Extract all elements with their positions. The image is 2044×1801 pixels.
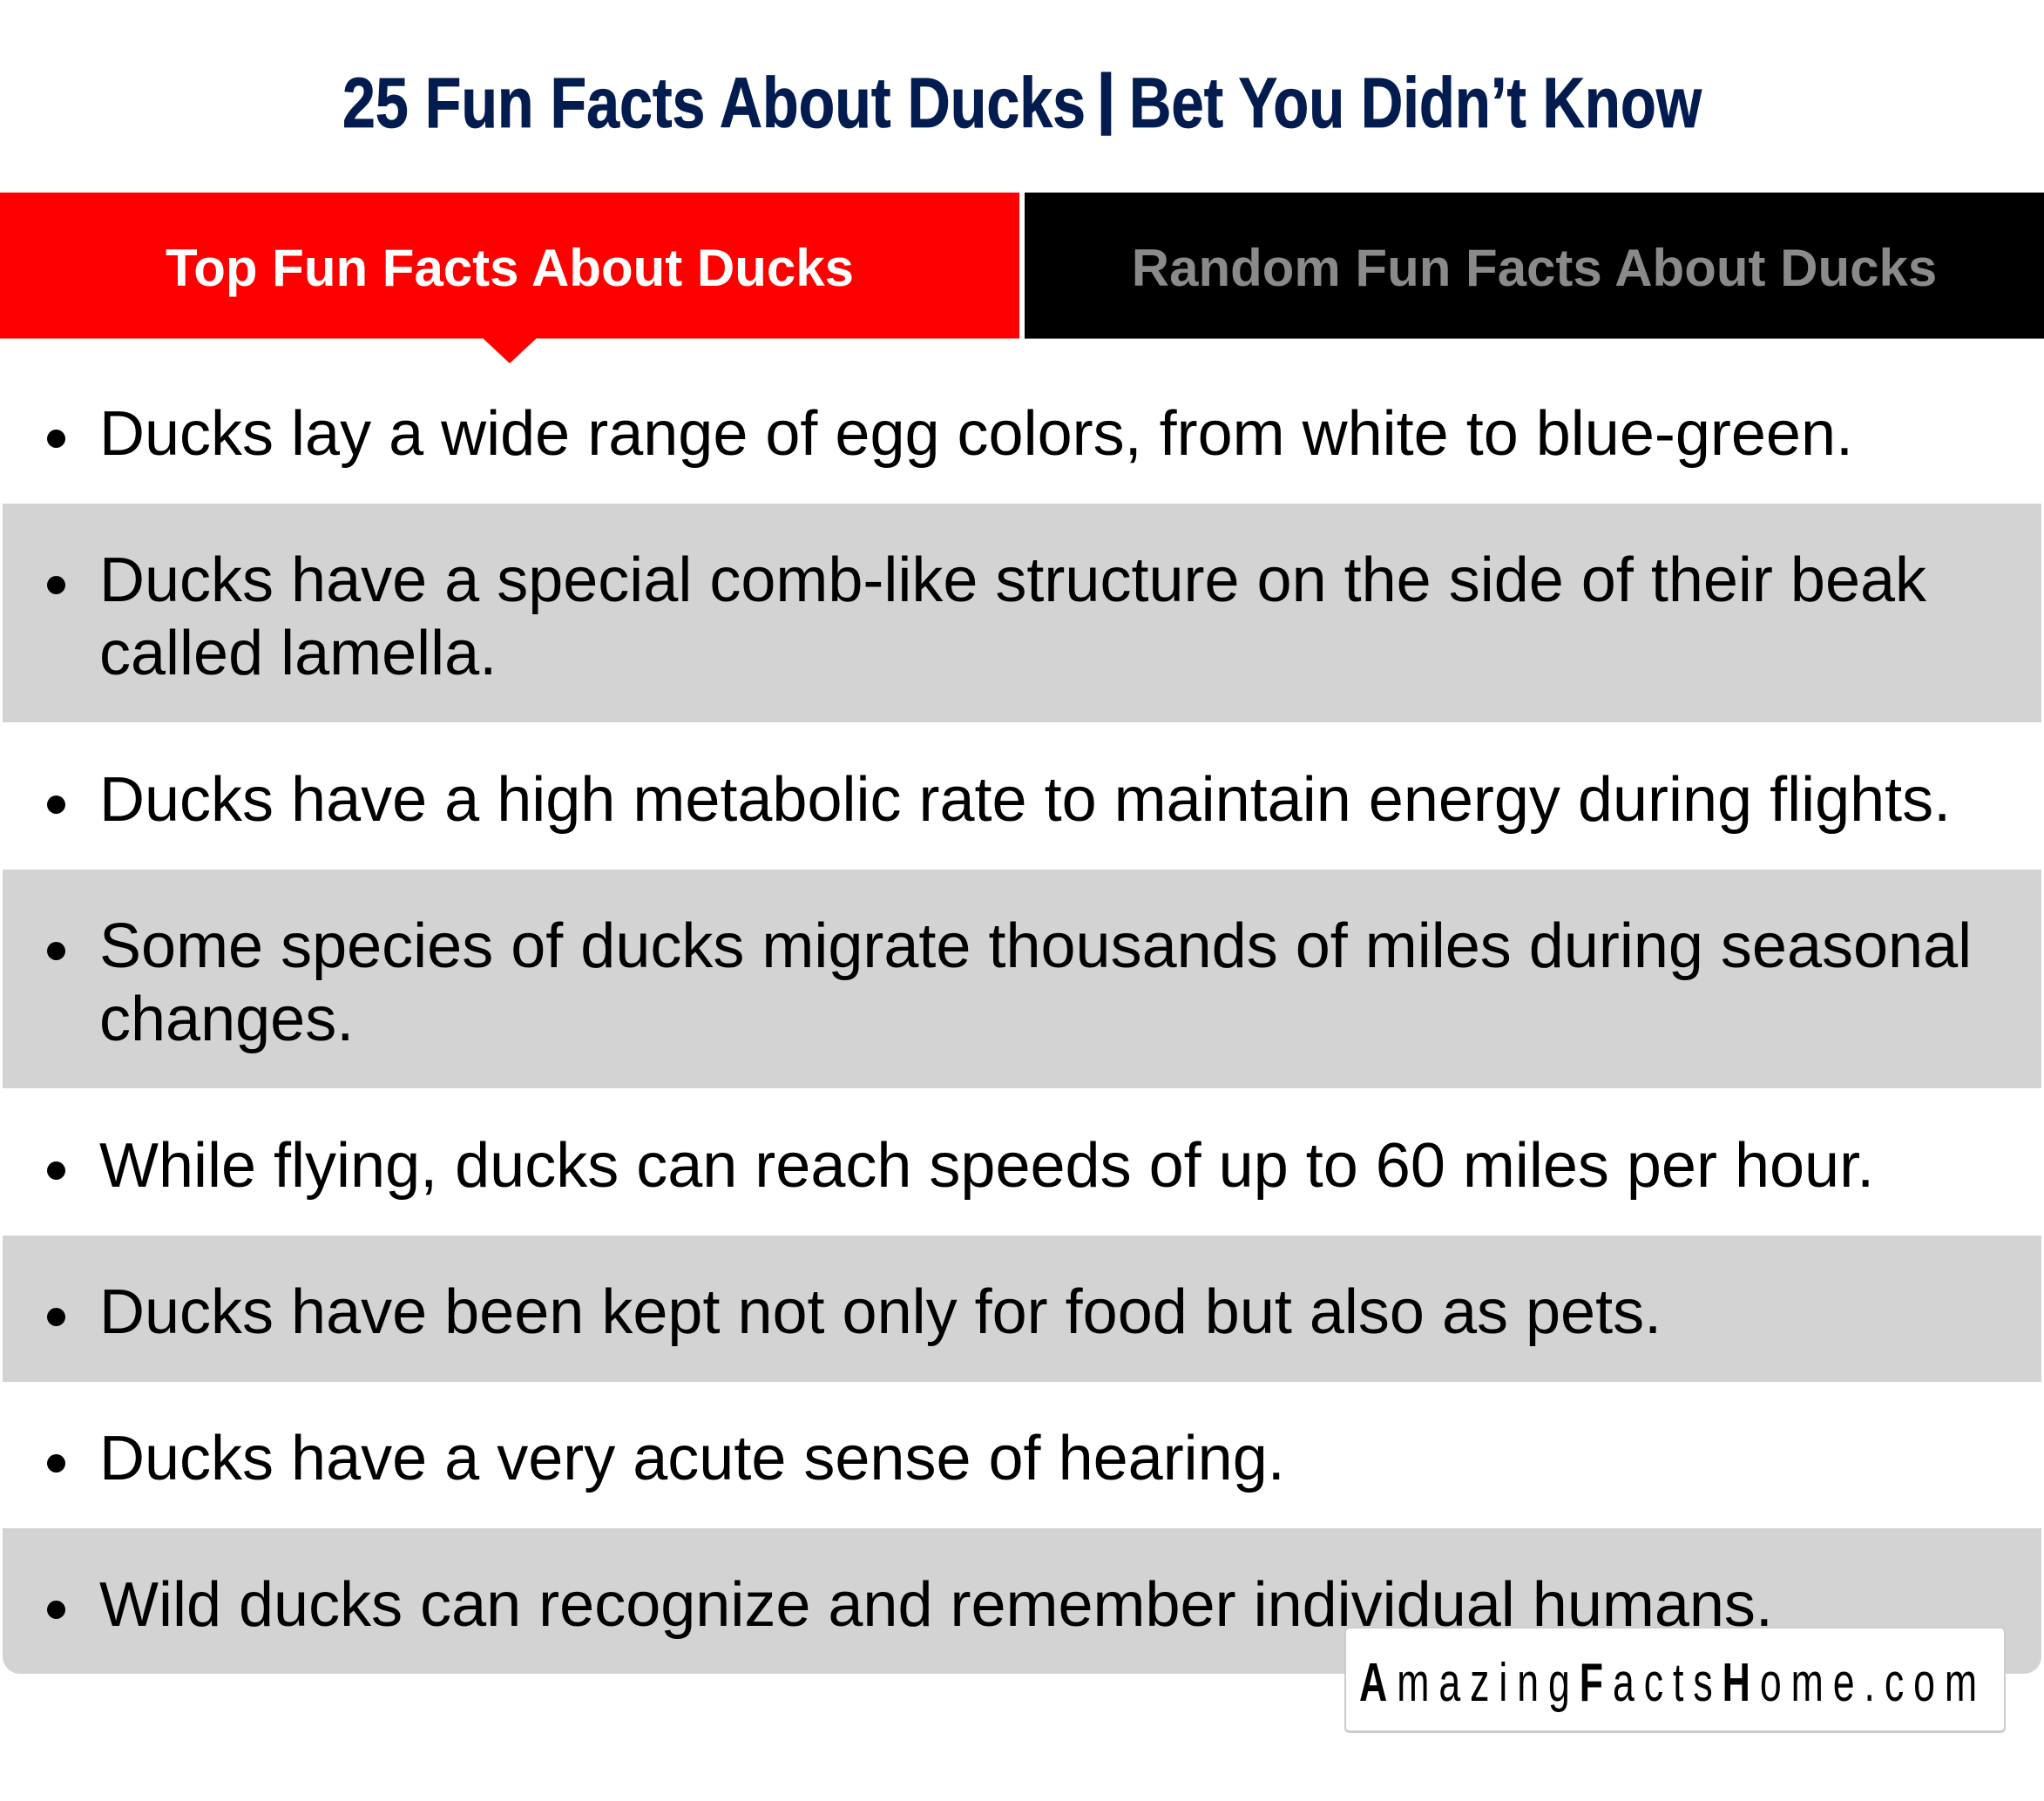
fact 2 [3,504,2041,722]
fact 8 [3,1528,2041,1674]
fact 4: changes. [99,985,354,1054]
fact 6 [3,1236,2041,1382]
tab: random fun facts (inactive): Random Fun Facts About Ducks [1132,239,1937,297]
tab pointer arrow [484,338,536,363]
title: Bet You Didn’t Know [1129,64,1702,143]
tab: random fun facts (inactive) [1025,193,2044,339]
fact 6: Ducks have been kept not only for food but also as pets. [99,1277,1662,1347]
fact 3: Ducks have a high metabolic rate to maintain energy during flights. [99,765,1951,835]
fact 4: Some species of ducks migrate thousands of miles during seasonal [99,911,1972,981]
fact 4 [3,870,2041,1088]
fact 8: Wild ducks can recognize and remember individual humans. [99,1570,1773,1640]
fact 2: called lamella. [99,619,497,688]
fact 2: Ducks have a special comb-like structure on the side of their beak [99,545,1926,615]
fact 7: Ducks have a very acute sense of hearing. [99,1424,1285,1493]
title: 25 Fun Facts About Ducks [342,64,1086,143]
fact 5: While flying, ducks can reach speeds of up to 60 miles per hour. [99,1131,1874,1201]
tab: top fun facts (active) [0,193,1019,339]
watermark text: AmazingFactsHome.com [1359,1653,1986,1713]
watermark badge [1344,1627,2006,1733]
title [342,61,1702,143]
tab: top fun facts (active): Top Fun Facts About Ducks [166,239,854,297]
title: | [1097,61,1115,135]
fact 1: Ducks lay a wide range of egg colors, from white to blue-green. [99,399,1853,469]
